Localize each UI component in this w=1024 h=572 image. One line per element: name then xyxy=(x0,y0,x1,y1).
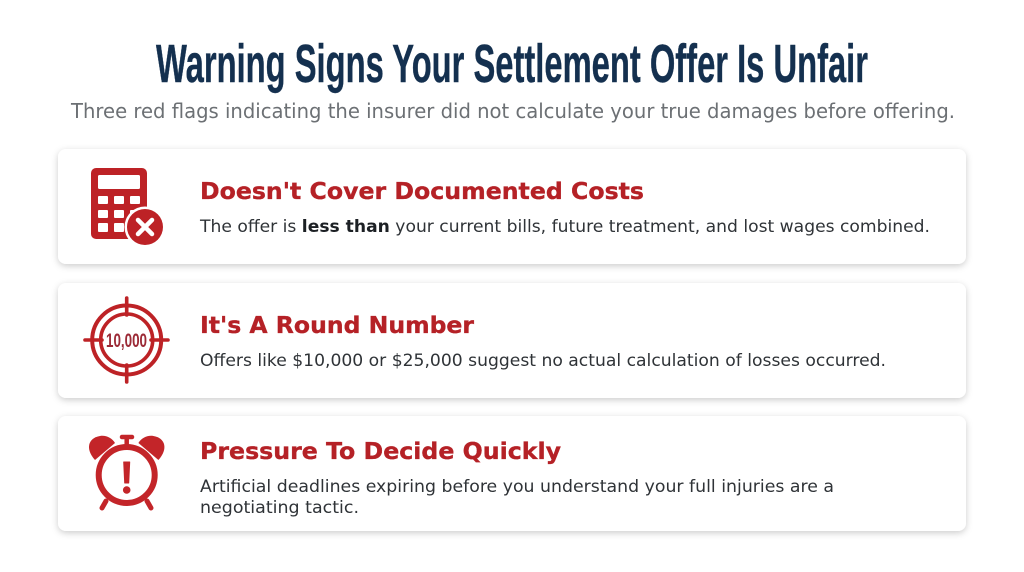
icon: calculator with x badge xyxy=(91,168,166,248)
icon: target with 10,000: 10,000 xyxy=(106,331,147,352)
heading: It's A Round Number xyxy=(200,311,474,339)
heading: Pressure To Decide Quickly xyxy=(200,437,561,465)
heading: Doesn't Cover Documented Costs xyxy=(200,177,644,205)
panel: round number xyxy=(58,283,966,398)
body text: Offers like $10,000 or $25,000 suggest no actual calculation of losses occurred. xyxy=(200,351,886,370)
body text: negotiating tactic. xyxy=(200,498,359,517)
subtitle: Three red flags indicating the insurer did not calculate your true damages before offering. xyxy=(70,99,955,123)
panel: documented costs xyxy=(58,149,966,264)
panel: pressure xyxy=(58,416,966,531)
body text: The offer is less than your current bills, future treatment, and lost wages combined. xyxy=(199,217,930,236)
icon: target with 10,000 xyxy=(85,298,168,382)
icon: alarm clock xyxy=(89,436,164,508)
body text: Artificial deadlines expiring before you understand your full injuries are a xyxy=(200,477,834,496)
body text xyxy=(200,477,834,517)
